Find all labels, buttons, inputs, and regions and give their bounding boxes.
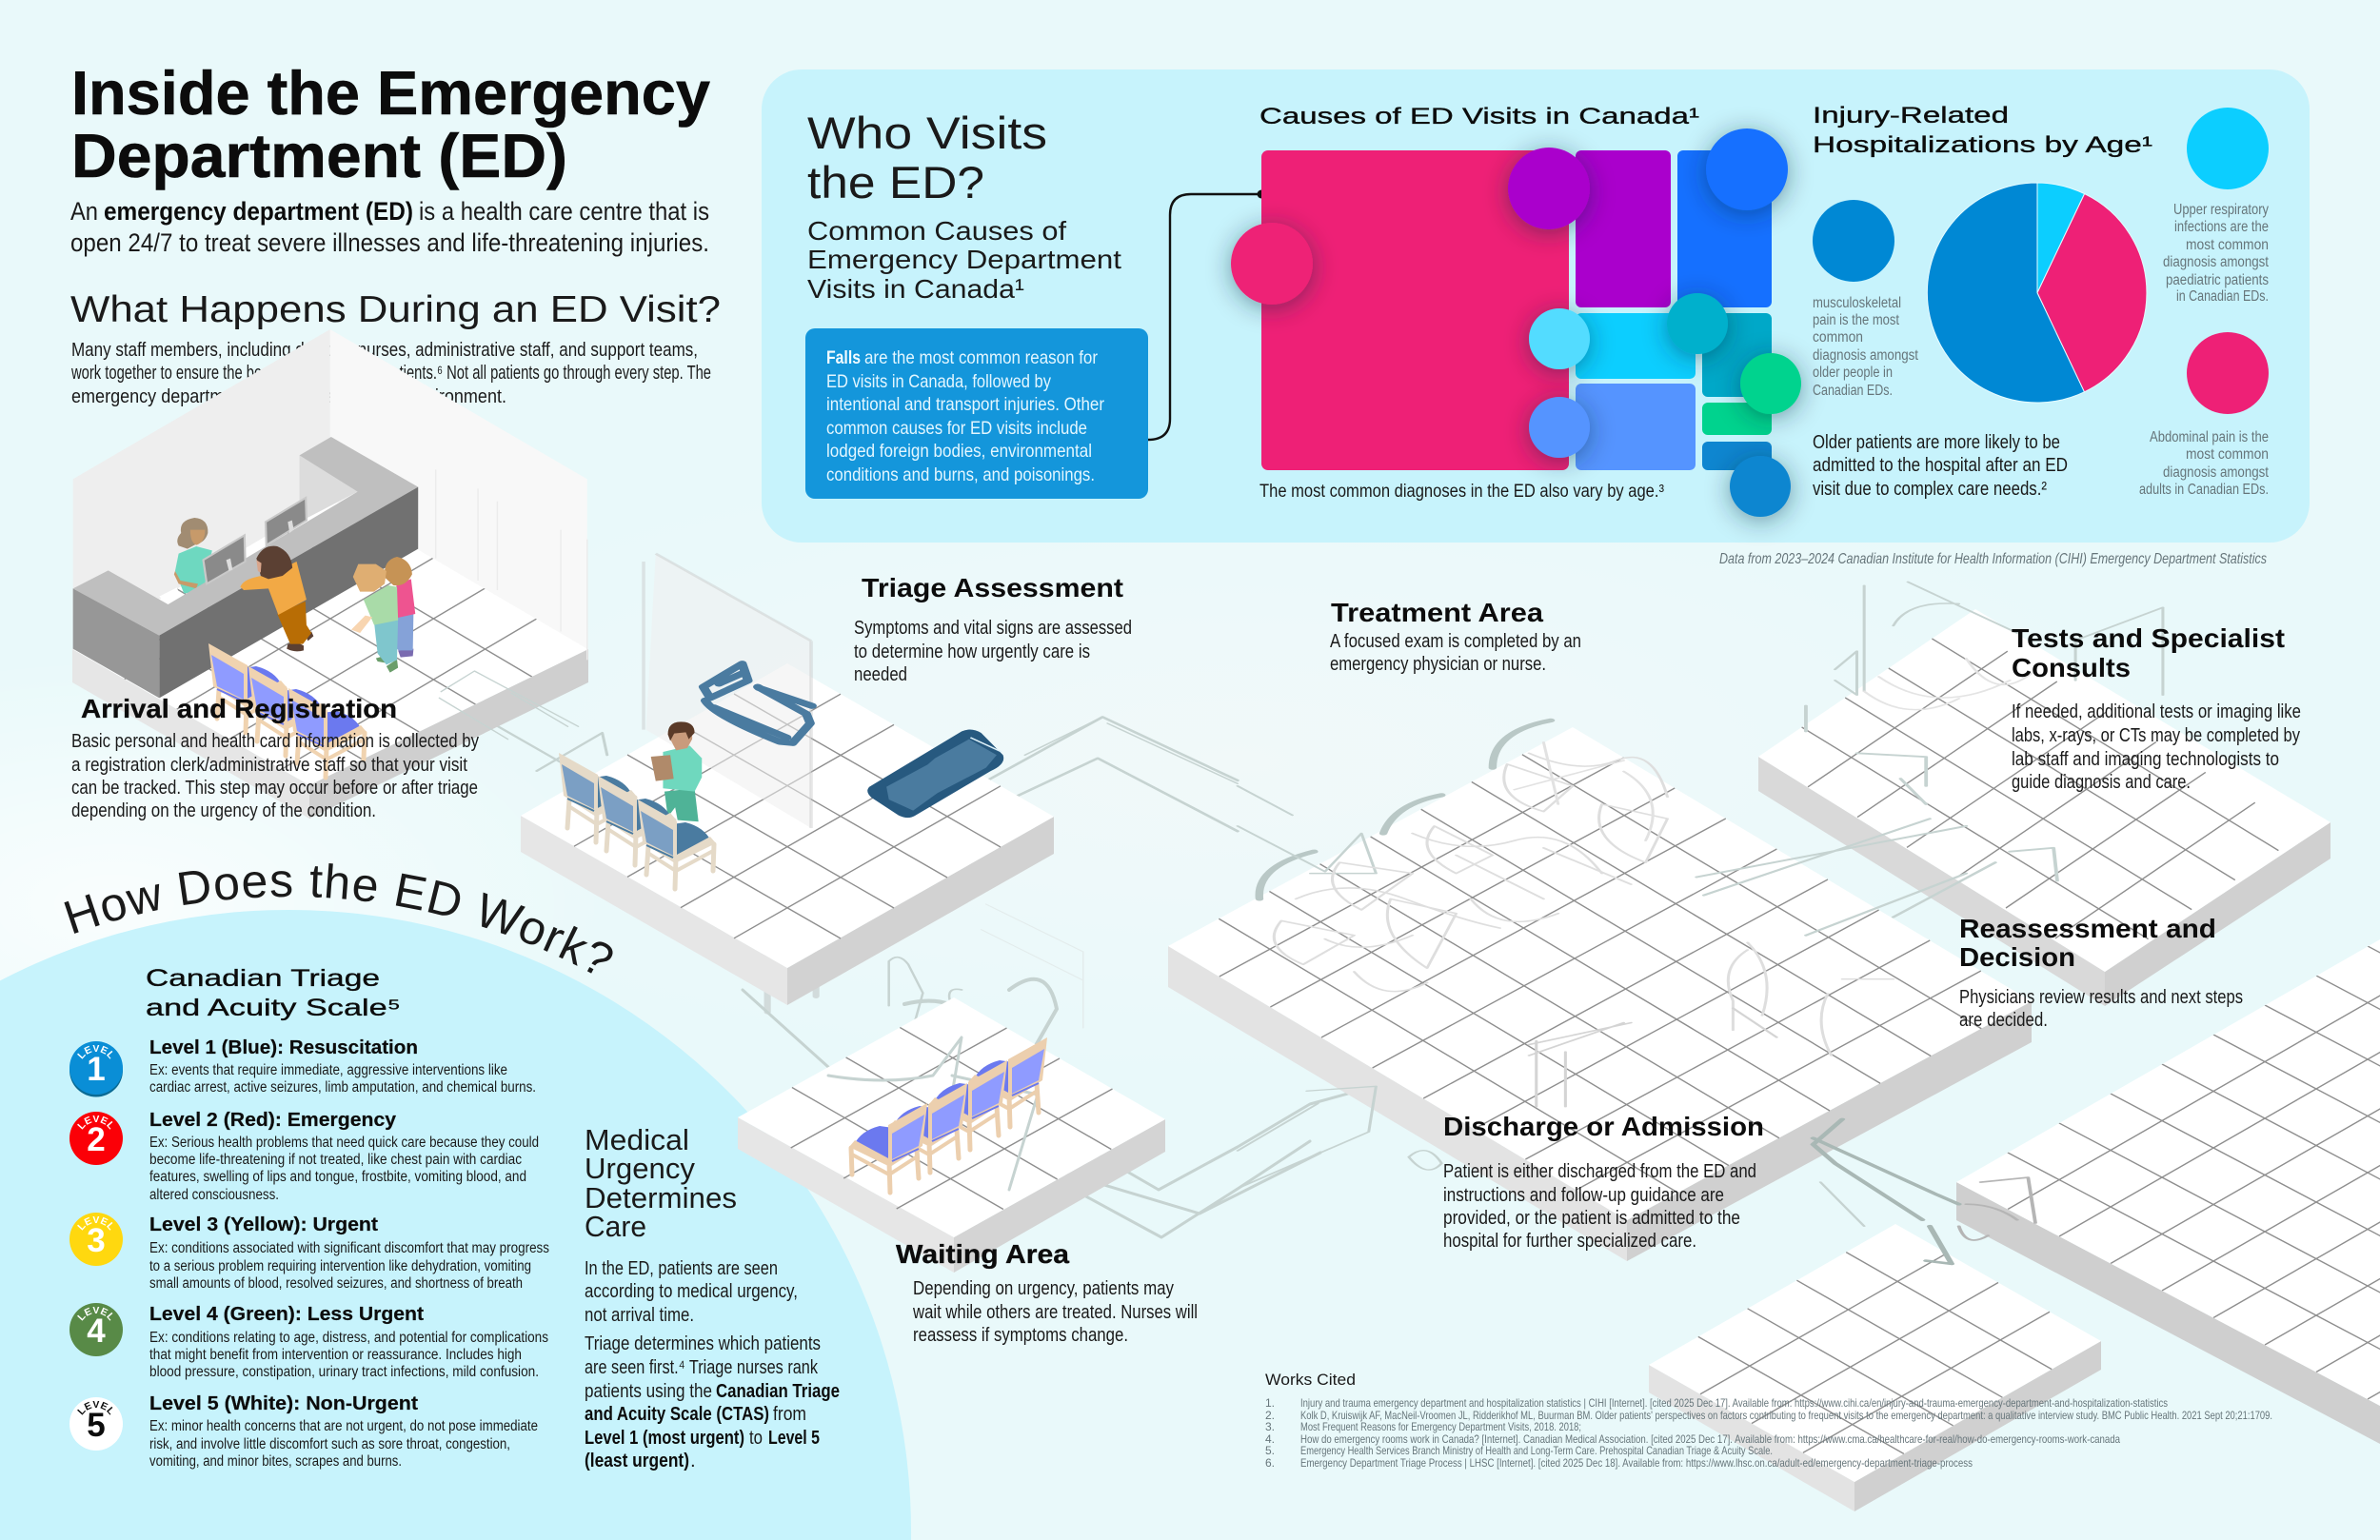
chairs: registration	[208, 643, 367, 778]
text: what happens paragraph: work together to ensure the best possible care for patients.⁶ Not all patients go through every step. The	[70, 363, 711, 384]
level 2 text: Level 2 (Red): Emergency	[149, 1110, 397, 1131]
step: discharge or admission: Patient is either discharged from the ED and	[1443, 1161, 1756, 1182]
level 5 text: risk, and involve little discomfort such as sore throat, congestion,	[149, 1436, 510, 1452]
legend: adults: diagnosis amongst	[2163, 464, 2270, 481]
callout: falls: lodged foreign bodies, environmental	[826, 441, 1092, 462]
step: triage assessment: needed	[854, 664, 907, 685]
badge: level 2	[69, 1112, 123, 1165]
text: medical urgency explanation: from	[773, 1403, 806, 1425]
legend: adults: adults in Canadian EDs.	[2139, 482, 2269, 498]
legend: older people: pain is the most	[1813, 312, 1900, 328]
text: medical urgency explanation: and Acuity Scale (CTAS)	[585, 1403, 769, 1425]
legend: paediatric: infections are the	[2174, 219, 2269, 235]
level 5 text	[149, 1393, 538, 1470]
step: discharge or admission: instructions and follow-up guidance are	[1443, 1185, 1724, 1206]
step: triage assessment: to determine how urgently care is	[854, 642, 1090, 662]
platform: waiting area	[738, 997, 1165, 1273]
heading: injury-related hospitalizations: Injury-Related	[1813, 103, 2009, 128]
platform: treatment area	[1168, 727, 2032, 1261]
text: medical urgency explanation: not arrival time.	[585, 1304, 694, 1326]
wall left	[73, 329, 330, 650]
text: what happens paragraph: Many staff members, including doctors, nurses, administrative staff, and support teams,	[71, 340, 698, 361]
works cited: 2.	[1265, 1409, 1275, 1422]
heading: what happens during an ED visit: What Happens During an ED Visit?	[70, 289, 721, 330]
callout: falls: are the most common reason for	[864, 347, 1098, 368]
subheading: common causes: Emergency Department	[807, 245, 1121, 274]
step: tests and specialist consults: guide diagnosis and care.	[2012, 772, 2191, 793]
step: triage assessment	[854, 573, 1132, 685]
text: medical urgency explanation: In the ED, patients are seen	[585, 1257, 778, 1279]
subheading: common causes	[807, 216, 1121, 304]
intro text: open 24/7 to treat severe illnesses and life-threatening injuries.	[70, 228, 709, 257]
text: medical urgency explanation: patients using the	[585, 1380, 712, 1402]
step: waiting area: Depending on urgency, patients may	[913, 1278, 1174, 1299]
step: waiting area: Waiting Area	[896, 1239, 1069, 1269]
text: diagnoses note: The most common diagnoses in the ED also vary by age.³	[1259, 482, 1664, 502]
text: medical urgency explanation: according to medical urgency,	[585, 1280, 798, 1302]
level 3 text: small amounts of blood, resolved seizures, and shortness of breath	[149, 1275, 523, 1292]
legend: adults: most common	[2186, 446, 2269, 463]
step: tests and specialist consults: Tests and Specialist	[2012, 623, 2285, 653]
step: reassessment and decision: Decision	[1959, 942, 2075, 972]
level 5 text: Ex: minor health concerns that are not urgent, do not pose immediate	[149, 1418, 538, 1434]
heading: how does the ED work: How Does the ED Work?	[64, 863, 613, 974]
page title: Inside the Emergency	[71, 58, 710, 128]
step: arrival and registration: depending on the urgency of the condition.	[71, 800, 376, 821]
step: waiting area: reassess if symptoms change.	[913, 1325, 1128, 1346]
sketch: faint route lines	[476, 714, 1376, 1237]
legend: older people: musculoskeletal	[1813, 295, 1901, 311]
badge: level 2: 2	[87, 1121, 106, 1158]
level 4 text	[149, 1304, 548, 1380]
text: medical urgency explanation: .	[690, 1450, 696, 1471]
step: tests and specialist consults: If needed, additional tests or imaging like	[2012, 701, 2301, 722]
heading: injury-related hospitalizations: Hospitalizations by Age¹	[1813, 132, 2152, 158]
legend: older people: common	[1813, 329, 1863, 346]
level 4 text: Level 4 (Green): Less Urgent	[149, 1304, 424, 1325]
step: discharge or admission	[1443, 1112, 1764, 1252]
step: arrival and registration	[71, 694, 479, 821]
heading: medical urgency: Medical	[585, 1123, 689, 1156]
intro text: is a health care centre that is	[419, 197, 709, 226]
works cited: 4.	[1265, 1432, 1275, 1446]
level 4 text: Ex: conditions relating to age, distress, and potential for complications	[149, 1330, 548, 1346]
legend: paediatric: diagnosis amongst	[2163, 254, 2270, 270]
works cited: 5.	[1265, 1444, 1275, 1457]
arrow: callout to treemap	[1148, 190, 1266, 440]
badge: level 3: 3	[87, 1222, 106, 1259]
step: waiting area	[896, 1239, 1198, 1346]
level 4 text: blood pressure, constipation, urinary tract infections, mild confusion.	[149, 1364, 539, 1380]
illustration: arrival and registration room	[73, 329, 587, 740]
chart: pie by age	[1927, 183, 2147, 403]
text: medical urgency explanation: Canadian Triage	[716, 1380, 840, 1402]
step: triage assessment: Symptoms and vital signs are assessed	[854, 618, 1132, 639]
legend: paediatric: in Canadian EDs.	[2176, 288, 2269, 305]
platform: reassessment and decision	[1956, 939, 2380, 1444]
level 1 text: Ex: events that require immediate, aggressive interventions like	[149, 1062, 507, 1078]
text: medical urgency explanation: Triage determines which patients	[585, 1333, 821, 1354]
badge: level 3: LEVEL	[77, 1216, 112, 1231]
text: medical urgency explanation: are seen first.⁴ Triage nurses rank	[585, 1356, 819, 1378]
nurse	[651, 721, 702, 821]
legend: older people: diagnosis amongst	[1813, 347, 1919, 364]
callout: falls: ED visits in Canada, followed by	[826, 371, 1051, 392]
text: older patients note: visit due to complex care needs.²	[1813, 479, 2047, 500]
step: arrival and registration: a registration clerk/administrative staff so that your visit	[71, 755, 467, 776]
badge: level 3	[69, 1213, 123, 1266]
level 2 text: become life-threatening if not treated, like chest pain with cardiac	[149, 1152, 522, 1168]
heading: medical urgency: Urgency	[585, 1152, 695, 1185]
text: medical urgency explanation: (least urgent)	[585, 1450, 689, 1471]
works cited: Works Cited	[1265, 1371, 1356, 1389]
wheelchair	[704, 663, 812, 743]
step: treatment area: A focused exam is completed by an	[1330, 631, 1581, 652]
works cited: Emergency Health Services Branch Ministry of Health and Long-Term Care. Prehospital Canadian Triage & Acuity Scale.	[1300, 1444, 1773, 1457]
level 3 text	[149, 1214, 549, 1292]
works cited: 6.	[1265, 1456, 1275, 1470]
step: tests and specialist consults: lab staff and imaging technologists to	[2012, 749, 2279, 770]
works cited: Injury and trauma emergency department and hospitalization statistics | CIHI [Internet]. [cited 2025 Dec 17]. Available from: https://www.cihi.ca/en/injury-and-trauma-emergency-department-and-hospitalization-statistics	[1300, 1396, 2168, 1410]
legend: paediatric	[2163, 108, 2270, 305]
platform: registration floor	[72, 497, 588, 819]
text: what happens paragraph: emergency department is a fast-paced care environment.	[71, 386, 506, 407]
step: arrival and registration: Arrival and Registration	[81, 694, 397, 723]
intro text: emergency department (ED)	[104, 197, 413, 226]
badge: level 2: LEVEL	[77, 1116, 112, 1130]
heading: canadian triage scale: Canadian Triage	[146, 965, 380, 992]
level 5 text: Level 5 (White): Non-Urgent	[149, 1393, 418, 1414]
illustration: triage room	[644, 554, 1003, 828]
legend: adults	[2139, 332, 2270, 498]
step: treatment area: emergency physician or nurse.	[1330, 654, 1546, 675]
badge: level 1: LEVEL	[77, 1045, 112, 1059]
step: discharge or admission: hospital for further specialized care.	[1443, 1231, 1696, 1252]
sketch: faint staff and bed outlines	[1238, 582, 2163, 1264]
callout: falls: Falls	[826, 347, 861, 368]
text: medical urgency explanation	[585, 1257, 840, 1471]
text: medical urgency explanation: Level 1 (most urgent)	[585, 1427, 744, 1449]
badge: level 5: LEVEL	[77, 1401, 112, 1415]
subheading: common causes: Visits in Canada¹	[807, 274, 1024, 304]
patient at desk	[240, 546, 313, 651]
heading: canadian triage scale: and Acuity Scale⁵	[146, 995, 401, 1021]
level 2 text: altered consciousness.	[149, 1187, 279, 1203]
badge: level 4	[69, 1303, 123, 1356]
heading: causes of ED visits: Causes of ED Visits in Canada¹	[1259, 104, 1699, 129]
heading: medical urgency: Determines	[585, 1181, 737, 1214]
works cited: Most Frequent Reasons for Emergency Department Visits, 2018. 2018;	[1300, 1420, 1581, 1433]
platform: discharge	[1649, 1224, 2101, 1511]
legend: paediatric: paediatric patients	[2166, 272, 2269, 288]
heading: injury-related hospitalizations	[1813, 103, 2152, 158]
heading: who visits	[807, 108, 1047, 207]
step: reassessment and decision: are decided.	[1959, 1010, 2048, 1031]
page title	[71, 58, 710, 190]
level 1 text	[149, 1037, 536, 1096]
level 3 text: Ex: conditions associated with significant discomfort that may progress	[149, 1240, 549, 1256]
step: arrival and registration: can be tracked. This step may occur before or after triage	[71, 778, 478, 799]
chairs: waiting area	[849, 1037, 1047, 1193]
heading: who visits: the ED?	[807, 157, 984, 207]
badge: level 5	[69, 1397, 123, 1451]
heading: medical urgency: Care	[585, 1210, 646, 1243]
step: reassessment and decision	[1959, 914, 2243, 1031]
legend: older people: Canadian EDs.	[1813, 383, 1893, 399]
works cited: 3.	[1265, 1420, 1275, 1433]
step: tests and specialist consults: Consults	[2012, 653, 2131, 682]
stretcher	[867, 729, 1003, 818]
level 1 text: Level 1 (Blue): Resuscitation	[149, 1037, 418, 1058]
monitors	[204, 535, 246, 583]
step: treatment area: Treatment Area	[1331, 598, 1543, 627]
badge: level 1: 1	[87, 1051, 106, 1088]
works cited: How do emergency rooms work in Canada? [Internet]. Canadian Medical Association. [cited 2025 Dec 17]. Available from: https://www.cma.ca/healthcare-for-real/how-do-emergency-rooms-work-canada	[1300, 1432, 2120, 1446]
subheading: common causes: Common Causes of	[807, 216, 1066, 246]
callout: falls: conditions and burns, and poisonings.	[826, 464, 1095, 485]
step: reassessment and decision: Reassessment and	[1959, 914, 2216, 943]
badge: level 4: LEVEL	[77, 1307, 112, 1321]
panel: who visits the ED	[762, 69, 2310, 543]
step: triage assessment: Triage Assessment	[862, 573, 1123, 602]
works cited: 1.	[1265, 1396, 1275, 1410]
counter	[73, 437, 418, 636]
level 1 text: cardiac arrest, active seizures, limb amputation, and chemical burns.	[149, 1079, 536, 1096]
callout: falls: common causes for ED visits include	[826, 418, 1087, 439]
legend: paediatric: Upper respiratory	[2173, 202, 2269, 218]
text: medical urgency explanation: Level 5	[768, 1427, 820, 1449]
text: older patients note	[1813, 432, 2068, 500]
step: tests and specialist consults	[2012, 623, 2301, 793]
step: discharge or admission: Discharge or Admission	[1443, 1112, 1764, 1141]
heading: medical urgency	[585, 1123, 737, 1243]
two patients	[351, 557, 415, 673]
legend: older people	[1813, 200, 1919, 399]
level 4 text: that might benefit from intervention or reassurance. Includes high	[149, 1347, 522, 1363]
level 2 text	[149, 1110, 539, 1203]
badge: level 1	[69, 1041, 123, 1096]
text: what happens paragraph	[70, 340, 711, 407]
glass screen	[646, 554, 811, 828]
page title: Department (ED)	[71, 121, 567, 190]
callout: falls: intentional and transport injuries. Other	[826, 394, 1104, 415]
works cited	[1265, 1371, 2272, 1470]
callout: falls	[805, 328, 1148, 499]
level 2 text: Ex: Serious health problems that need quick care because they could	[149, 1135, 539, 1151]
step: arrival and registration: Basic personal and health card information is collected by	[71, 731, 479, 752]
text: older patients note: admitted to the hospital after an ED	[1813, 455, 2068, 476]
step: tests and specialist consults: labs, x-rays, or CTs may be completed by	[2012, 725, 2300, 746]
step: reassessment and decision: Physicians review results and next steps	[1959, 987, 2243, 1008]
step: treatment area	[1330, 598, 1581, 675]
intro text: An	[70, 197, 98, 226]
heading: who visits: Who Visits	[807, 108, 1047, 158]
step: discharge or admission: provided, or the patient is admitted to the	[1443, 1208, 1740, 1229]
text: older patients note: Older patients are more likely to be	[1813, 432, 2060, 453]
heading: canadian triage scale	[146, 965, 401, 1021]
receptionist	[174, 518, 212, 593]
level 3 text: to a serious problem requiring intervention like dehydration, vomiting	[149, 1258, 531, 1274]
level 2 text: features, swelling of lips and tongue, frostbite, vomiting blood, and	[149, 1169, 526, 1185]
works cited: Emergency Department Triage Process | LHSC [Internet]. [cited 2025 Dec 18]. Available from: https://www.lhsc.on.ca/adult-ed/emergency-department-triage-process	[1300, 1456, 1973, 1470]
badge: level 5: 5	[87, 1407, 106, 1444]
level 3 text: Level 3 (Yellow): Urgent	[149, 1214, 378, 1235]
step: waiting area: wait while others are treated. Nurses will	[912, 1302, 1198, 1323]
intro text	[70, 197, 709, 257]
chart: treemap of causes	[1231, 128, 1801, 517]
legend: paediatric: most common	[2186, 237, 2269, 253]
badge: level 4: 4	[87, 1313, 106, 1350]
legend: older people: older people in	[1813, 365, 1893, 381]
chairs: triage	[559, 753, 716, 889]
wall right	[330, 329, 587, 649]
platform: tests and specialist consults	[1758, 609, 2330, 1006]
platform: triage	[521, 663, 1054, 1005]
legend: adults: Abdominal pain is the	[2150, 429, 2269, 445]
text: medical urgency explanation: to	[749, 1427, 763, 1449]
level 5 text: vomiting, and minor bites, scrapes and burns.	[149, 1453, 402, 1470]
